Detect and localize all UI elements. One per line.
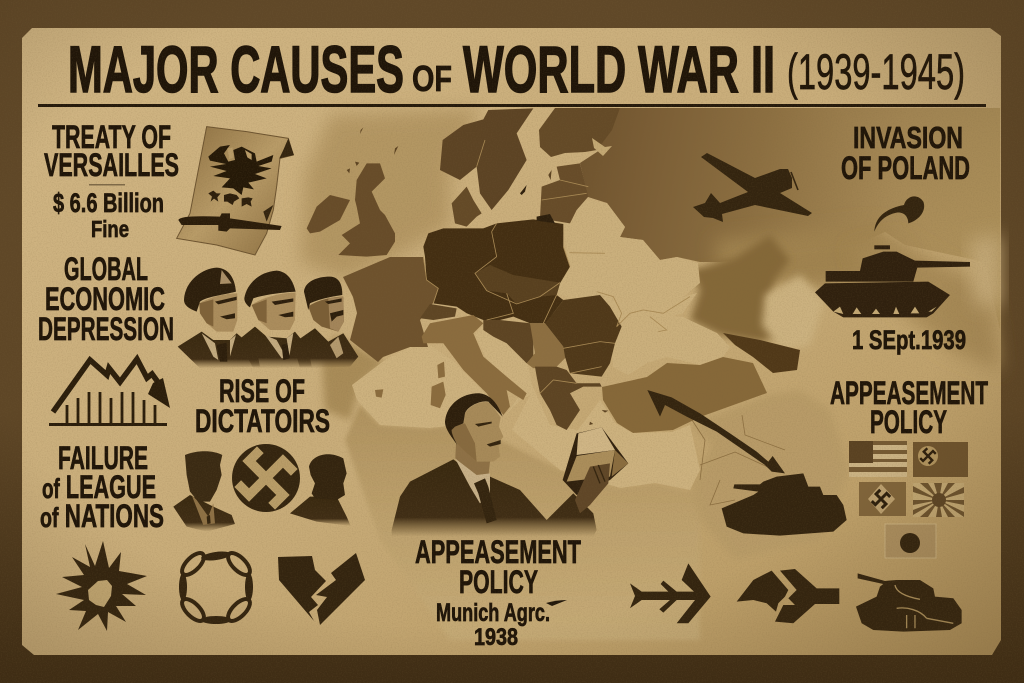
flag: rising sun [913, 483, 964, 517]
icon: eagle head highlight [227, 147, 252, 160]
dictator 3 [293, 277, 358, 368]
map cracks: Middle East borders [692, 415, 785, 505]
map shading: Middle East [690, 390, 850, 560]
icon: sword [178, 213, 282, 232]
heading: Appeasement Policy right [830, 375, 988, 440]
icon: curved smoke arrow [874, 196, 924, 232]
map region: eastern steppe [850, 240, 1000, 370]
dictator 2 [238, 271, 312, 368]
illustration: statesman with Munich agreement [392, 393, 628, 537]
map region: Great Britain [338, 163, 395, 257]
icon: broken arrow [737, 569, 839, 623]
heading: Global Economic Depression: GLOBAL [64, 251, 148, 287]
icon: falling economy chart [49, 359, 170, 426]
tie [474, 478, 497, 523]
heading: Treaty of Versailles: Fine [91, 216, 129, 242]
heading: Invasion of Poland: INVASION [853, 120, 963, 155]
map region: Caucasus [723, 333, 800, 373]
map region: Romania and Bulgaria [545, 295, 622, 377]
map region: Caspian [762, 275, 825, 352]
icon: stars [208, 191, 253, 207]
map shading: France south haze [322, 335, 385, 420]
icon: eagle [208, 145, 273, 195]
map region: Black Sea [612, 313, 730, 375]
map region: Italy [422, 315, 527, 415]
heading: Treaty of Versailles: VERSAILLES [44, 147, 179, 183]
map region: Russia southern edge haze [715, 225, 905, 290]
map of Europe [300, 108, 1000, 640]
title [68, 32, 965, 106]
face [452, 402, 503, 462]
flag: red with swastika [913, 442, 968, 477]
icon: tank over Poland [815, 245, 970, 317]
heading: Global Economic Depression: DEPRESSION [38, 311, 174, 347]
icon: treaty scroll [177, 127, 294, 255]
icon: swastika emblem [232, 444, 300, 512]
map region: Germany, Poland and Hungary [423, 219, 570, 323]
hair [445, 393, 503, 445]
heading: Rise of Dictatoirs [195, 373, 330, 439]
map region: Serbia [527, 323, 567, 368]
map region: Denmark [452, 187, 482, 227]
heading: Rise of Dictatoirs: DICTATOIRS [195, 403, 330, 439]
heading: Appeasement Policy center: 1938 [474, 624, 518, 651]
heading: Failure of League of Nations [40, 440, 164, 534]
map shading: North Africa [345, 405, 700, 640]
flag: swastika [859, 482, 906, 516]
title rule [38, 104, 986, 107]
heading: Failure of League of Nations: of LEAGUE [42, 469, 156, 505]
title: OF [412, 58, 452, 99]
heading: Appeasement Policy center: POLICY [459, 564, 538, 600]
map region: Finland [539, 108, 620, 157]
map region: Czechoslovakia [475, 265, 560, 304]
map region: Switzerland and Alps [420, 304, 457, 320]
icon: broken heart [278, 553, 365, 625]
collar [455, 458, 490, 503]
icon: warplane [693, 153, 812, 222]
icon: dictator silhouette left [173, 451, 235, 532]
map region: Baltic islands [520, 185, 555, 223]
heading: Appeasement Policy center [415, 534, 581, 651]
heading: Treaty of Versailles: TREATY OF [52, 119, 171, 155]
icon: tank center right [722, 473, 847, 536]
map region: Scandinavia [440, 108, 533, 210]
map region: Sardinia and Corsica [375, 362, 446, 408]
heading: Appeasement Policy center: APPEASEMENT [415, 534, 581, 570]
title: MAJOR CAUSES [68, 32, 404, 106]
heading: Failure of League of Nations: FAILURE [58, 440, 148, 476]
icon: dictator silhouette right [290, 454, 351, 526]
map region: eastern light patch [970, 235, 1000, 305]
map shading: Atlantic cloud [300, 108, 480, 280]
icon: small dark islands [347, 127, 608, 425]
heading: Treaty of Versailles [44, 119, 179, 242]
map region: Ireland [307, 195, 350, 233]
illustration: three dictators [178, 268, 358, 368]
book [563, 427, 628, 495]
map country borders [423, 140, 690, 393]
map region: France [343, 257, 438, 362]
title: WORLD WAR II [463, 32, 775, 106]
flag: United States [849, 441, 907, 477]
map region: Mediterranean sea [352, 323, 700, 490]
heading: Treaty of Versailles: $ 6.6 Billion [53, 188, 164, 218]
map region: Greece [535, 367, 602, 430]
coat [392, 459, 597, 537]
heading: Appeasement Policy right: POLICY [870, 404, 947, 440]
neck [455, 443, 490, 477]
icon: broken chain [179, 550, 253, 624]
heading: Global Economic Depression: ECONOMIC [45, 281, 165, 317]
map group in zoom coordinates [307, 108, 690, 430]
map region: Turkey [602, 357, 767, 433]
map region: Yugoslavia [483, 320, 533, 363]
icon: tank bottom right [856, 573, 962, 632]
dictator 1 [178, 268, 260, 368]
heading: Invasion of Poland [841, 120, 970, 186]
map region: Russia [545, 108, 1000, 330]
icon: explosion [56, 541, 147, 631]
map region: Baltic states [540, 163, 588, 223]
heading: Global Economic Depression [38, 251, 174, 347]
hand [575, 463, 610, 513]
flags [849, 441, 968, 558]
map region: light lake [592, 138, 612, 156]
heading: Invasion of Poland: OF POLAND [841, 150, 970, 186]
map region: Ukraine and Belarus [557, 200, 700, 330]
map region: southern Russia [690, 235, 790, 342]
icon: arrow with chevrons [630, 563, 711, 623]
label: invasion date: 1 SEpt.1939 [852, 325, 966, 355]
arrow: tank advance [647, 390, 785, 473]
heading: Failure of League of Nations: of NATIONS [40, 498, 164, 534]
heading: Rise of Dictatoirs: RISE OF [219, 373, 305, 409]
heading: Appeasement Policy center: Munich Agrc. [436, 599, 550, 627]
flag: Japan [885, 524, 936, 558]
